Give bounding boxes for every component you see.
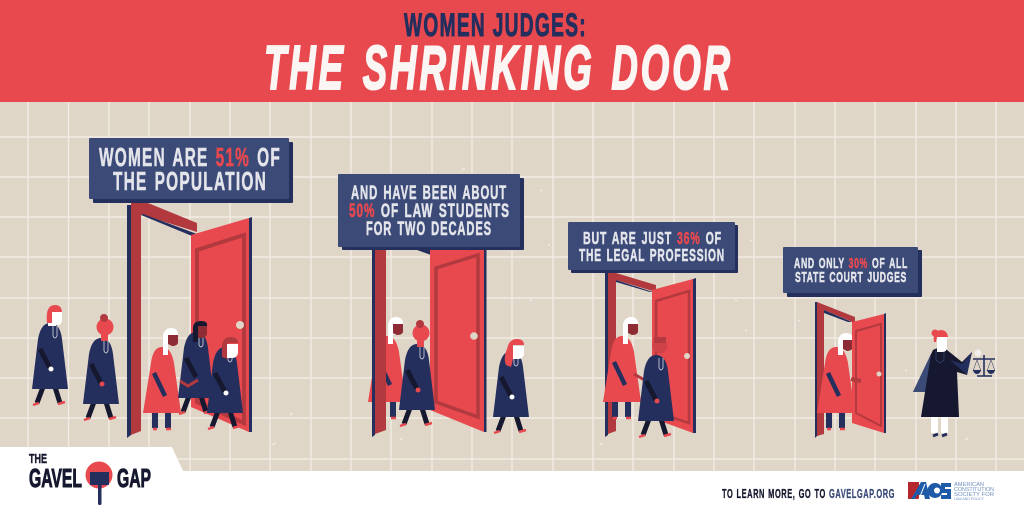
door 3 frame: [605, 273, 656, 437]
sign: women are 51%: WOMEN ARE 51% OF: [99, 142, 281, 172]
figure: judge: [913, 330, 982, 436]
sign: 50% of law students: [338, 174, 524, 250]
sign: 30% state court judges: AND ONLY 30% OF ALL: [794, 255, 908, 272]
figure: woman in red robe 1: [143, 328, 181, 429]
panel: 30% of state court judges: [783, 247, 995, 438]
heading: women judges: WOMEN JUDGES:: [404, 7, 587, 43]
sign: 36% legal profession: [568, 222, 738, 273]
logo: american constitution society: AMERICAN: [954, 482, 984, 488]
logo: the gavel gap: THE: [29, 452, 47, 466]
door 2 post: [372, 250, 431, 437]
door 1 frame: [127, 203, 197, 438]
figure: woman with bun: [83, 314, 119, 420]
figure: woman with bun 2: [399, 320, 435, 426]
sign: 30% state court judges: STATE COURT JUDGES: [795, 269, 907, 286]
sign: 36% legal profession: THE LEGAL PROFESSION: [579, 245, 725, 265]
figure: woman in red robe 3: [603, 317, 648, 418]
logo: the gavel gap: [29, 452, 151, 505]
footer band with logo tab: [0, 447, 1024, 512]
figure: woman in red robe 2: [368, 317, 406, 418]
panel: 50% of law students: [338, 174, 529, 437]
figure: woman outside door: [493, 339, 529, 433]
footer call to action: TO LEARN MORE, GO TO GAVELGAP.ORG: [722, 487, 895, 501]
logo: the gavel gap: GAVEL: [29, 463, 82, 493]
sign: 50% of law students: FOR TWO DECADES: [366, 218, 492, 240]
logo: american constitution society: [908, 482, 994, 501]
figure: woman entering door: [638, 337, 674, 437]
sign: 50% of law students: 50% OF LAW STUDENTS: [349, 200, 510, 222]
header banner: [0, 0, 1024, 102]
sign: women are 51%: THE POPULATION: [113, 166, 267, 196]
logo: american constitution society: CONSTITUTION: [954, 487, 994, 493]
figure: woman with black hair: [178, 321, 214, 414]
door 4 frame: [815, 302, 855, 438]
panel: 36% of the legal profession: [568, 222, 738, 437]
figure: woman front: [207, 337, 243, 429]
door 2 panel: [430, 250, 486, 432]
figure: woman in red robe 4: [817, 333, 855, 429]
sign: 50% of law students: AND HAVE BEEN ABOUT: [351, 182, 507, 204]
sign: women are 51%: [89, 138, 293, 203]
door 3 panel: [652, 278, 696, 433]
sign: 30% state court judges: [783, 247, 922, 297]
sign: 36% legal profession: BUT ARE JUST 36% OF: [583, 228, 722, 248]
logo: american constitution society: LAW AND POLICY: [954, 497, 985, 501]
panel: 51% of the population: [32, 138, 293, 438]
door 4 panel: [851, 313, 886, 433]
icon: scales of justice: [973, 355, 995, 376]
logo: american constitution society: SOCIETY FOR: [954, 492, 994, 498]
door 1 panel: [191, 217, 252, 432]
icon: gavel: [86, 462, 112, 505]
figure: woman with red hair: [32, 305, 68, 405]
logo: the gavel gap: GAP: [117, 463, 151, 493]
